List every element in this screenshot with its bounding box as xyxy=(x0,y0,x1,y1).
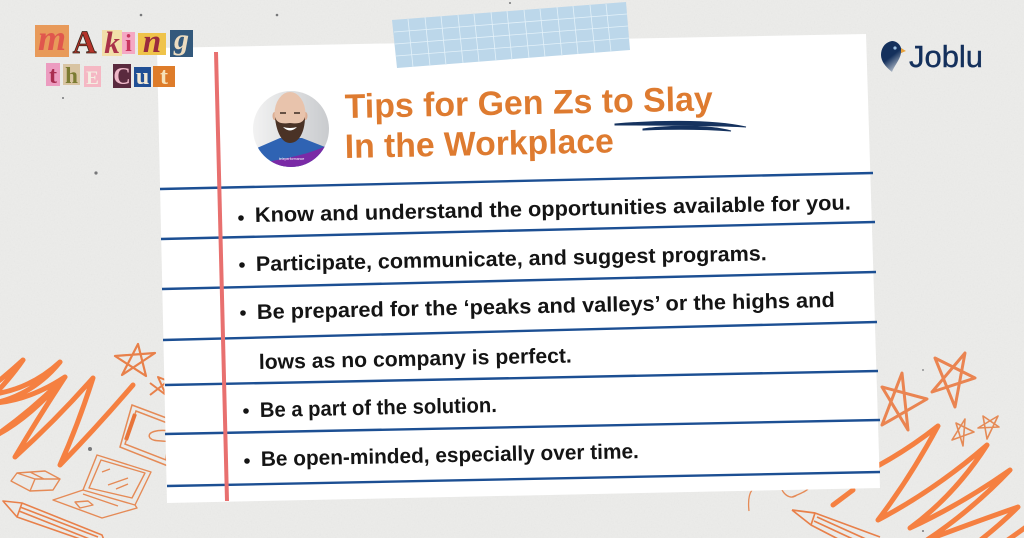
icon: left pencil xyxy=(3,501,104,538)
icon: right star top xyxy=(932,353,975,407)
icon: right pencil xyxy=(792,510,880,538)
paper sheet xyxy=(157,34,880,503)
logo: Making the Cut: h xyxy=(65,63,78,88)
tips list xyxy=(238,192,851,471)
tip 5: Be open-minded, especially over time. xyxy=(261,440,639,471)
icon: bird xyxy=(881,41,906,72)
ruled blue lines xyxy=(160,173,880,486)
logo: Making the Cut: n xyxy=(143,24,161,60)
logo: Joblu xyxy=(881,39,983,74)
logo: Making the Cut: m xyxy=(38,18,66,58)
title: Tips for Gen Zs to Slay xyxy=(344,80,713,126)
photo: speaker portrait xyxy=(253,91,330,170)
logo: Making the Cut xyxy=(35,18,193,90)
title xyxy=(344,80,713,166)
tip 2: Participate, communicate, and suggest programs. xyxy=(256,242,767,276)
icon: eraser xyxy=(11,471,60,491)
tip 4: Be a part of the solution. xyxy=(260,394,497,422)
tip 3: Be prepared for the ‘peaks and valleys’ or the highs and xyxy=(257,289,835,324)
icon: left small star xyxy=(150,377,168,395)
logo: Making the Cut: E xyxy=(86,68,99,89)
logo: Making the Cut: t xyxy=(49,63,57,89)
icon: clipboard xyxy=(120,405,172,466)
scribble: right orange xyxy=(833,426,1024,538)
title: In the Workplace xyxy=(344,122,614,166)
wordmark: Joblu xyxy=(909,39,983,74)
logo: Making the Cut: g xyxy=(173,23,189,56)
icon: laptop xyxy=(53,455,151,518)
scribble: left orange xyxy=(0,360,133,465)
icon: right star large xyxy=(882,373,927,430)
red margin line xyxy=(216,52,227,501)
title underline scribble xyxy=(615,121,746,131)
logo: Making the Cut: A xyxy=(73,25,97,61)
logo: Making the Cut: u xyxy=(136,64,149,90)
panel: lined paper xyxy=(157,34,880,503)
icon: right small star right xyxy=(978,416,999,439)
logo: Making the Cut: t xyxy=(160,64,168,90)
logo: Making the Cut: k xyxy=(104,25,120,60)
logo: Making the Cut: i xyxy=(125,31,132,57)
photo: speaker portrait: teleperformance xyxy=(279,157,304,161)
small doodles below paper xyxy=(749,489,808,511)
icon: right small star left xyxy=(952,419,974,446)
tip 3 xyxy=(240,289,835,374)
tip 1: Know and understand the opportunities available for you. xyxy=(255,192,851,227)
icon: left large star xyxy=(115,344,155,376)
washi tape xyxy=(392,2,630,68)
tip 3: lows as no company is perfect. xyxy=(259,344,572,374)
logo: Making the Cut: C xyxy=(113,64,131,90)
